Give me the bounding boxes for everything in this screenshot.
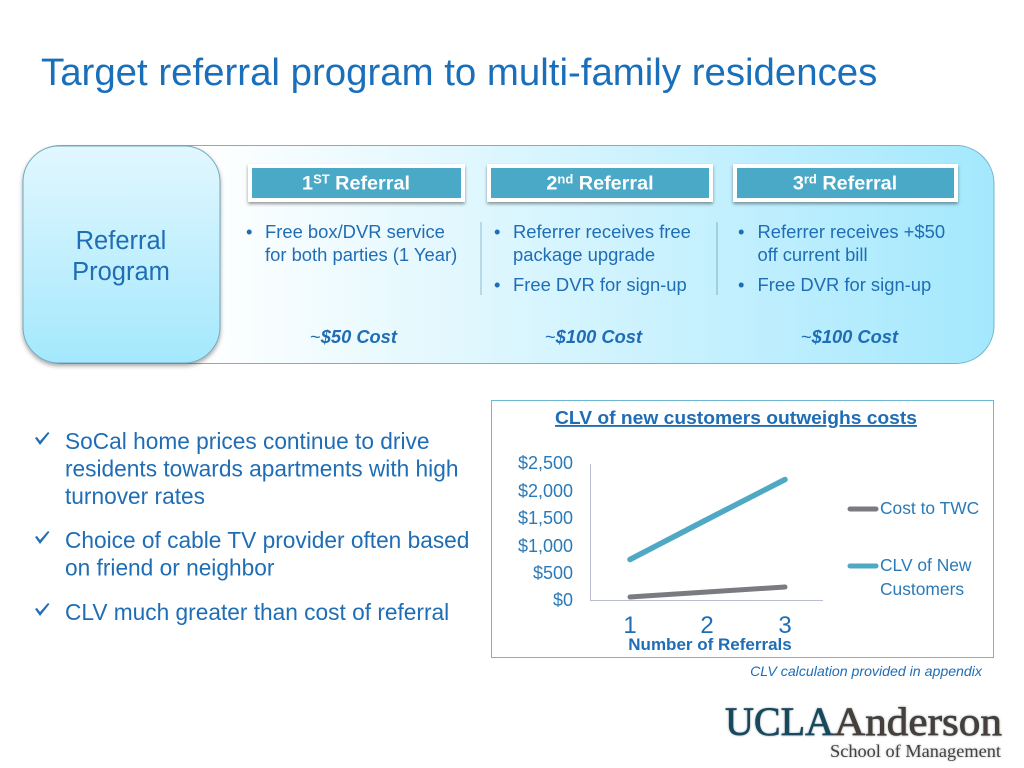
text: 3rd referral benefits: • [738,274,744,295]
x axis title: Number of Referrals [628,635,792,654]
text: 2nd referral benefits [494,221,691,295]
header: 3rd referral: rd [804,172,817,186]
cost: 1st referral: ~$50 Cost [310,326,398,347]
panel: referral program label [23,146,220,363]
checklist: on friend or neighbor [65,554,275,580]
text: 2nd referral benefits: • [494,274,500,295]
header: 2nd referral [487,164,713,202]
legend: CLV of new customers: CLV of New [880,555,972,575]
icon: check [35,531,50,544]
line: cost to TWC [630,587,785,597]
panel: referral program label: Program [72,258,170,286]
panel: line chart [492,400,994,658]
header: 3rd referral: Referral [817,172,897,194]
icon: check [35,603,50,616]
checklist: Choice of cable TV provider often based [65,527,469,553]
text: 2nd referral benefits: • [494,221,500,242]
checklist: turnover rates [65,483,205,509]
footnote: CLV calculation provided in appendix [750,663,983,679]
text: 1st referral benefits: for both parties (1 Year) [265,244,457,265]
y axis labels: $2,000 [518,481,573,501]
y axis labels: $1,000 [518,536,573,556]
header: 1st referral: ST [313,172,330,186]
header: 2nd referral: nd [557,172,573,186]
logo: UCLA Anderson [725,699,1002,761]
text: 2nd referral benefits: package upgrade [513,244,655,265]
logo: UCLA Anderson: Anderson [834,699,1002,744]
header: 3rd referral: 3 [793,172,804,194]
legend: CLV of new customers: Customers [880,579,964,599]
x axis labels: 1 [623,612,637,639]
checklist: residents towards apartments with high [65,456,458,482]
header: 1st referral [248,164,465,202]
logo: UCLA Anderson: UCLA [725,699,834,744]
header: 1st referral: Referral [330,172,410,194]
checklist: SoCal home prices continue to drive [65,428,429,454]
line: CLV of new customers [630,480,785,560]
x axis labels [623,612,792,639]
text: 1st referral benefits [246,221,457,265]
text: 2nd referral benefits: Referrer receives free [513,221,691,242]
y axis labels [518,453,573,610]
legend: CLV of new customers [850,555,972,599]
text: 2nd referral benefits: Free DVR for sign-up [513,274,687,295]
y axis labels: $500 [533,563,573,583]
y axis labels: $1,500 [518,508,573,528]
text: 1st referral benefits: Free box/DVR service [265,221,445,242]
text: 1st referral benefits: • [246,221,252,242]
y axis labels: $0 [553,590,573,610]
text: 3rd referral benefits: Referrer receives +$50 [758,221,945,242]
cost: 3rd referral: ~$100 Cost [801,326,899,347]
panel: referral tiers [23,146,994,364]
y axis labels: $2,500 [518,453,573,473]
chart title: CLV of new customers outweighs costs [555,407,917,428]
checklist: CLV much greater than cost of referral [65,599,449,625]
text: 3rd referral benefits [738,221,945,295]
title: Target referral program to multi-family residences [41,51,877,94]
x axis labels: 3 [778,612,792,639]
icon: check [35,432,50,445]
header: 2nd referral: Referral [573,172,654,194]
panel: referral program label: Referral [76,227,166,255]
text: 3rd referral benefits: off current bill [758,244,868,265]
x axis labels: 2 [700,612,714,639]
text: 3rd referral benefits: • [738,221,744,242]
legend: cost to TWC: Cost to TWC [880,498,979,518]
header: 2nd referral: 2 [546,172,557,194]
header: 3rd referral [733,164,958,202]
logo: UCLA Anderson: School of Management [830,741,1001,761]
checklist [35,428,469,625]
header: 1st referral: 1 [302,172,313,194]
text: 3rd referral benefits: Free DVR for sign-up [758,274,931,295]
cost: 2nd referral: ~$100 Cost [545,326,643,347]
